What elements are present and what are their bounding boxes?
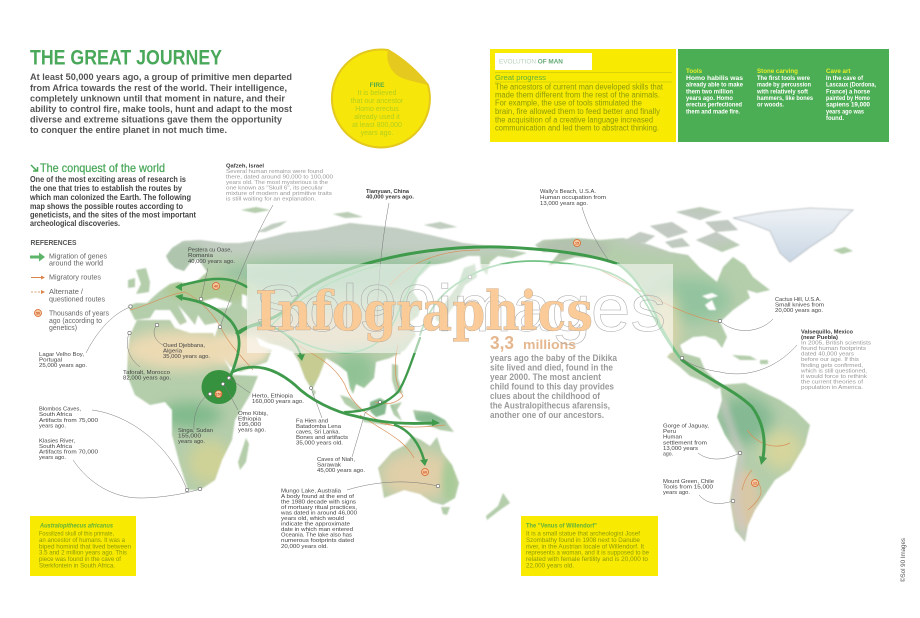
fire sticker [332, 49, 430, 147]
panel: Venus of Willendorf: It is a small statue that archeologist Josef [526, 532, 640, 538]
intro paragraph: to conquer the entire planet in not much time. [30, 125, 227, 136]
intro paragraph: from Africa towards the rest of the world. Their intelligence, [30, 83, 287, 94]
site label: Qafzeh: Qafzeh, Israel [226, 164, 264, 170]
panel: evolution of man: brain, fire allowed them to feed better and finally [495, 107, 660, 116]
conquest paragraph: map shows the possible routes according to [30, 202, 183, 211]
site label: Valsequillo [800, 330, 871, 391]
site label: Oued Djebbana [163, 343, 210, 360]
fire sticker: FIRE [370, 82, 385, 89]
site label: Pestera cu Oase: Pestera cu Oase, [188, 248, 232, 254]
site label: Gorge of Jaguay [663, 424, 709, 458]
origin markers in Africa [208, 376, 231, 398]
watermark text: Infographics [255, 279, 593, 343]
site label: Niah: Caves of Niah, [317, 457, 355, 463]
panel: tools, stone carving, cave art: Stone carving [757, 68, 798, 75]
panel: evolution of man: The ancestors of current man developed skills that [495, 82, 664, 92]
site label: Fa Hien [296, 418, 348, 446]
site label: Klasies River: South Africa [39, 444, 73, 450]
site label: Klasies River: Artifacts from 70,000 [39, 450, 98, 456]
site label: Valsequillo: In 2005, British scientists [801, 340, 871, 346]
panel: evolution of man: For example, the use of tools stimulated the [495, 99, 643, 108]
panel: tools, stone carving, cave art: painted by Homo [826, 95, 870, 102]
panel: Australopithecus africanus: Sterkfontein in South Africa. [39, 564, 115, 570]
legend: REFERENCES [30, 240, 77, 247]
panel: Venus of Willendorf: Szombathy found in 1908 next to Danube [526, 538, 641, 544]
site label: Mount Green [663, 479, 714, 496]
site label: Niah [317, 457, 365, 474]
panel: tools, stone carving, cave art: Cave art [826, 68, 850, 75]
panel: tools, stone carving, cave art: Tools [686, 68, 703, 75]
site label: Klasies River: years ago. [39, 455, 66, 461]
site label: Mungo Lake: 20,000 years old. [281, 544, 328, 550]
panel: Venus of Willendorf: related with female fertility and is 20,000 to [526, 557, 649, 563]
site label: Mount Green: Tools from 15,000 [663, 484, 713, 490]
migratory routes, thin orange [130, 250, 790, 510]
site markers [128, 275, 742, 503]
fire sticker: Homo erectus [355, 106, 399, 113]
site label: Lagar Velho: Portugal [39, 358, 62, 364]
site label: Valsequillo: the current theories of [801, 380, 863, 386]
site label: Fa Hien: Bones and artifacts [296, 435, 348, 441]
site label: Gorge of Jaguay: ago. [663, 452, 673, 458]
site label: Lagar Velho: Lagar Velho Boy, [39, 352, 84, 358]
site label: Omo Kibish: years ago. [238, 428, 266, 434]
site label: Valsequillo: before our age. If this [801, 357, 859, 363]
site label: Herto [252, 394, 304, 405]
site label: Pestera cu Oase: Romania [188, 253, 214, 259]
site label: Herto: 160,000 years ago. [252, 399, 304, 405]
inland seas [203, 293, 718, 310]
site label: Oued Djebbana: Oued Djebbana, [163, 343, 205, 349]
site label: Omo Kibish: 195,000 [238, 422, 261, 428]
site label: Valsequillo: finding gets confirmed, [801, 363, 863, 369]
legend: Migration of genes [49, 254, 107, 260]
site label: Oued Djebbana: 35,000 years ago. [163, 354, 210, 360]
site label: Qafzeh: is still waiting for an explanation. [226, 196, 316, 202]
site label: Valsequillo: (near Puebla) [801, 335, 838, 341]
site label: Herto: Herto, Ethiopia [252, 394, 294, 400]
panel: tools, stone carving, cave art: France) a horse [826, 88, 871, 95]
panel: evolution of man: EVOLUTION OF MAN [499, 58, 563, 66]
panel: Australopithecus africanus: 3.5 and 2 million years ago. This [39, 550, 127, 556]
watermark panel [247, 264, 673, 353]
site label: Valsequillo: it would force to rethink [801, 374, 867, 380]
site label: Mungo Lake [280, 488, 357, 550]
site label: Qafzeh: Several human remains were found [226, 169, 323, 175]
site label: Mount Green: Mount Green, Chile [663, 479, 714, 485]
legend: ago (according to [49, 318, 102, 325]
legend: 50 [36, 311, 40, 315]
panel: tools, stone carving, cave art: sapiens 19,000 [826, 102, 871, 109]
panel: Australopithecus africanus: Fossilized skull of this primate, [39, 532, 114, 538]
legend: Migratory routes [49, 274, 102, 282]
site label: Blombos: Blombos Caves, [39, 406, 81, 412]
site label: Klasies River: Klasies River, [39, 438, 75, 444]
conquest paragraph: geneticists, and the sites of the most important [30, 210, 196, 220]
site label: Qafzeh: there, dated around 90,000 to 100,000 [226, 174, 333, 180]
leader lines [73, 203, 797, 503]
Dikika paragraph: year 2000. The most ancient [490, 372, 601, 382]
panel: tools, stone carving, cave art: Lascaux (Dordona, [826, 82, 876, 89]
site label: Wally's Beach: Human occupation from [540, 195, 606, 201]
site label: Taforalt: 82,000 years ago. [123, 376, 171, 382]
panel: evolution of man: the acquisition of a creative language increased [495, 115, 653, 124]
site label: Klasies River [39, 438, 98, 461]
site label: Mungo Lake: date in which man entered [281, 527, 353, 533]
site label: Qafzeh: years old. The most mysterious is the [226, 180, 328, 186]
panel: tools, stone carving, cave art: them and made fire. [686, 108, 740, 115]
3,3 millions heading: 3,3 [490, 333, 514, 353]
site label: Valsequillo: dated 40,000 years [801, 352, 854, 358]
title: THE GREAT JOURNEY [30, 46, 222, 70]
conquest paragraph: archeological discoveries. [30, 219, 120, 228]
panel: tools, stone carving, cave art: In the cave of [826, 75, 864, 82]
panel: evolution of man [490, 49, 676, 142]
origin markers in Africa: 150 [216, 392, 222, 396]
panel: Venus of Willendorf: river, in the Austrian locale of Willendorf. It [526, 544, 644, 550]
site label: Wally's Beach [540, 189, 606, 207]
panel: tools, stone carving, cave art: found. [826, 115, 844, 122]
age markers [212, 240, 758, 486]
age markers: 12 [753, 481, 757, 485]
site label: Oued Djebbana: Algeria [163, 348, 183, 354]
site label: Qafzeh [226, 164, 333, 202]
fire sticker: at least 800,000 [352, 122, 402, 129]
site label: Niah: Sarawak [317, 462, 341, 468]
site label: Cactus Hill: 20,000 years ago. [775, 308, 823, 314]
site label: Pestera cu Oase: 40,000 years ago. [188, 259, 235, 265]
conquest paragraph: which man colonized the Earth. The following [29, 193, 191, 202]
Dikika paragraph: years ago the baby of the Dikika [490, 353, 617, 363]
site label: Tianyuan [366, 189, 414, 200]
panel: Australopithecus africanus: Australopithecus africanus [39, 522, 114, 530]
site label: Gorge of Jaguay: 13,000 years [663, 446, 698, 452]
3,3 millions heading [490, 333, 576, 353]
legend: Thousands of years [49, 310, 109, 318]
panel: Venus of Willendorf [521, 516, 658, 576]
panel: evolution of man: made them different from the rest of the animals. [495, 91, 660, 100]
site label: Valsequillo: found human footprints [801, 346, 866, 352]
site label: Valsequillo: population in America. [801, 385, 863, 391]
site label: Mungo Lake: the 1980 decade with signs [281, 500, 356, 506]
site label: Blombos: years ago. [39, 424, 66, 430]
Dikika paragraph: site lived and died, found in the [490, 362, 613, 372]
site label: Mungo Lake: Oceania. The lake also has [281, 532, 352, 538]
conquest heading: The conquest of the world [40, 161, 165, 175]
site label: Mungo Lake: of mortuary ritual practices, [281, 505, 357, 511]
site label: Blombos [39, 406, 98, 430]
gene migration routes, thick green [175, 247, 767, 466]
Dikika paragraph: clues about the childhood of [490, 391, 600, 401]
site label: Mungo Lake: years old, which would [281, 516, 344, 522]
Dikika paragraph [490, 353, 617, 420]
credit: ©Sol 90 Images [900, 538, 907, 582]
site label: Qafzeh: one known as "Skull 6", its peculiar [226, 186, 323, 192]
site label: Pestera cu Oase [188, 248, 235, 265]
site label: Gorge of Jaguay: settlement from [663, 440, 707, 446]
site label: Mungo Lake: was dated in around 46,000 [280, 510, 357, 516]
site label: Tianyuan: Tianyuan, China [366, 189, 410, 195]
panel: tools, stone carving, cave art: years ago. Homo [686, 95, 733, 102]
3,3 millions heading: millions [523, 338, 576, 352]
site label: Omo Kibish: Omo Kibiş, [238, 411, 268, 417]
panel: tools, stone carving, cave art: The first tools were [757, 75, 811, 82]
Dikika paragraph: the Australopithecus afarensis, [490, 400, 610, 410]
site label: Omo Kibish: Ethiopia [238, 416, 262, 422]
intro paragraph [30, 72, 293, 136]
panel: tools, stone carving, cave art: Homo habilis was [686, 75, 744, 82]
panel: Venus of Willendorf: The "Venus of Willendorf" [526, 522, 597, 530]
site label: Blombos: Artifacts from 75,000 [39, 418, 98, 424]
site label: Singa: 155,000 [178, 434, 201, 440]
site label: Cactus Hill: Small knives from [775, 302, 824, 308]
panel: Venus of Willendorf: represents a woman, and it is supposed to be [526, 550, 650, 556]
age markers: 15 [575, 241, 579, 245]
site label: Gorge of Jaguay: Peru [663, 429, 676, 435]
site label: Cactus Hill: Cactus Hill, U.S.A. [775, 297, 821, 303]
Dikika paragraph: another one of our ancestors. [490, 410, 604, 420]
intro paragraph: ability to control fire, make tools, hunt and adapt to the most [30, 104, 293, 115]
conquest paragraph: One of the most exciting areas of research is [30, 175, 187, 184]
site label: Lagar Velho [39, 352, 87, 369]
intro paragraph: At least 50,000 years ago, a group of primitive men departed [30, 72, 292, 83]
legend: genetics) [49, 325, 77, 332]
panel: tools, stone carving, cave art: with relatively soft [756, 88, 808, 95]
panel: tools, stone carving, cave art: made by percussion [757, 82, 811, 89]
Greenland [733, 208, 853, 262]
intro paragraph: completely unknown until that moment in nature, and their [30, 94, 285, 104]
conquest paragraph: the one that tries to establish the routes by [30, 184, 183, 193]
site label: Taforalt: Taforalt, Morocco [123, 370, 170, 376]
site label: Mungo Lake: Mungo Lake, Australia [281, 488, 342, 494]
site label: Cactus Hill [775, 297, 824, 314]
site label: Mount Green: years ago. [663, 490, 690, 496]
legend: around the world [49, 260, 103, 268]
panel: tools, stone carving, cave art: hammers, like bones [757, 95, 814, 102]
legend [30, 240, 109, 332]
site label: Gorge of Jaguay: Gorge of Jaguay, [663, 424, 709, 430]
legend: questioned routes [49, 296, 105, 304]
site label: Singa: Singa, Sudan [178, 428, 213, 434]
site label: Mungo Lake: numerous footprints dated [281, 538, 354, 544]
site label: Omo Kibish [238, 411, 268, 434]
panel: Australopithecus africanus: piece was found in the cave of [39, 557, 121, 563]
site label: Valsequillo: which is still questioned, [800, 368, 867, 374]
panel: Australopithecus africanus: an ancestor of humans. It was a [39, 538, 126, 544]
panel: evolution of man: communication and led them to abstract thinking. [495, 124, 659, 133]
age markers: 40 [214, 284, 218, 288]
site label: Singa [178, 428, 213, 445]
panel: evolution of man: Great progress [495, 73, 546, 82]
site label: Lagar Velho: 25,000 years ago. [39, 363, 87, 369]
fire sticker: that our ancestor [351, 98, 404, 105]
site label: Niah: 45,000 years ago. [317, 468, 365, 474]
panel: tools, stone carving, cave art: or woods. [757, 102, 784, 109]
site label: Wally's Beach: 13,000 years ago. [540, 201, 588, 207]
panel: Australopithecus africanus: biped hominid that lived between [39, 544, 131, 550]
site label: Fa Hien: Fa Hien and [296, 418, 328, 424]
intro paragraph: diverse and extreme situations gave them the opportunity [30, 114, 283, 126]
site label: Wally's Beach: Wally's Beach, U.S.A. [540, 189, 596, 195]
site label: Tianyuan: 40,000 years ago. [366, 194, 414, 200]
conquest paragraph [29, 175, 196, 228]
panel: tools, stone carving, cave art: erectus perfectioned [686, 102, 742, 109]
panel: tools, stone carving, cave art: already able to make [686, 82, 744, 89]
world map [120, 200, 860, 550]
age markers: 60 [423, 470, 427, 474]
fire sticker: It is believed [358, 90, 397, 97]
panel: Australopithecus africanus [30, 516, 136, 576]
site label: Fa Hien: caves, Sri Lanka. [296, 430, 340, 436]
site label: Singa: years ago. [178, 439, 205, 445]
site label: Blombos: South Africa [39, 412, 73, 418]
watermark text: Sol90images [255, 271, 666, 345]
Dikika paragraph: child found to this day provides [490, 382, 614, 392]
panel: tools, stone carving, cave art: years ago was [826, 108, 864, 115]
site label: Fa Hien: Batadomba Lena [296, 424, 342, 430]
panel: tools, stone carving, cave art: them two million [686, 88, 733, 95]
legend: Alternate / [49, 289, 83, 296]
fire sticker: years ago. [361, 130, 393, 137]
panel: tools, stone carving, cave art [678, 49, 889, 142]
site label: Qafzeh: mixture of modern and primitive traits [226, 191, 332, 197]
site label: Fa Hien: 35,000 years old. [296, 440, 343, 446]
fire sticker: already used it [354, 114, 400, 121]
site label: Mungo Lake: A body found at the end of [281, 494, 354, 500]
site label: Mungo Lake: indicate the approximate [281, 522, 350, 528]
site label: Taforalt [123, 370, 171, 382]
site label: Gorge of Jaguay: Human [663, 434, 682, 440]
panel: Venus of Willendorf: 22,000 years old. [526, 564, 574, 570]
site label: Valsequillo: Valsequillo, Mexico [801, 330, 853, 336]
